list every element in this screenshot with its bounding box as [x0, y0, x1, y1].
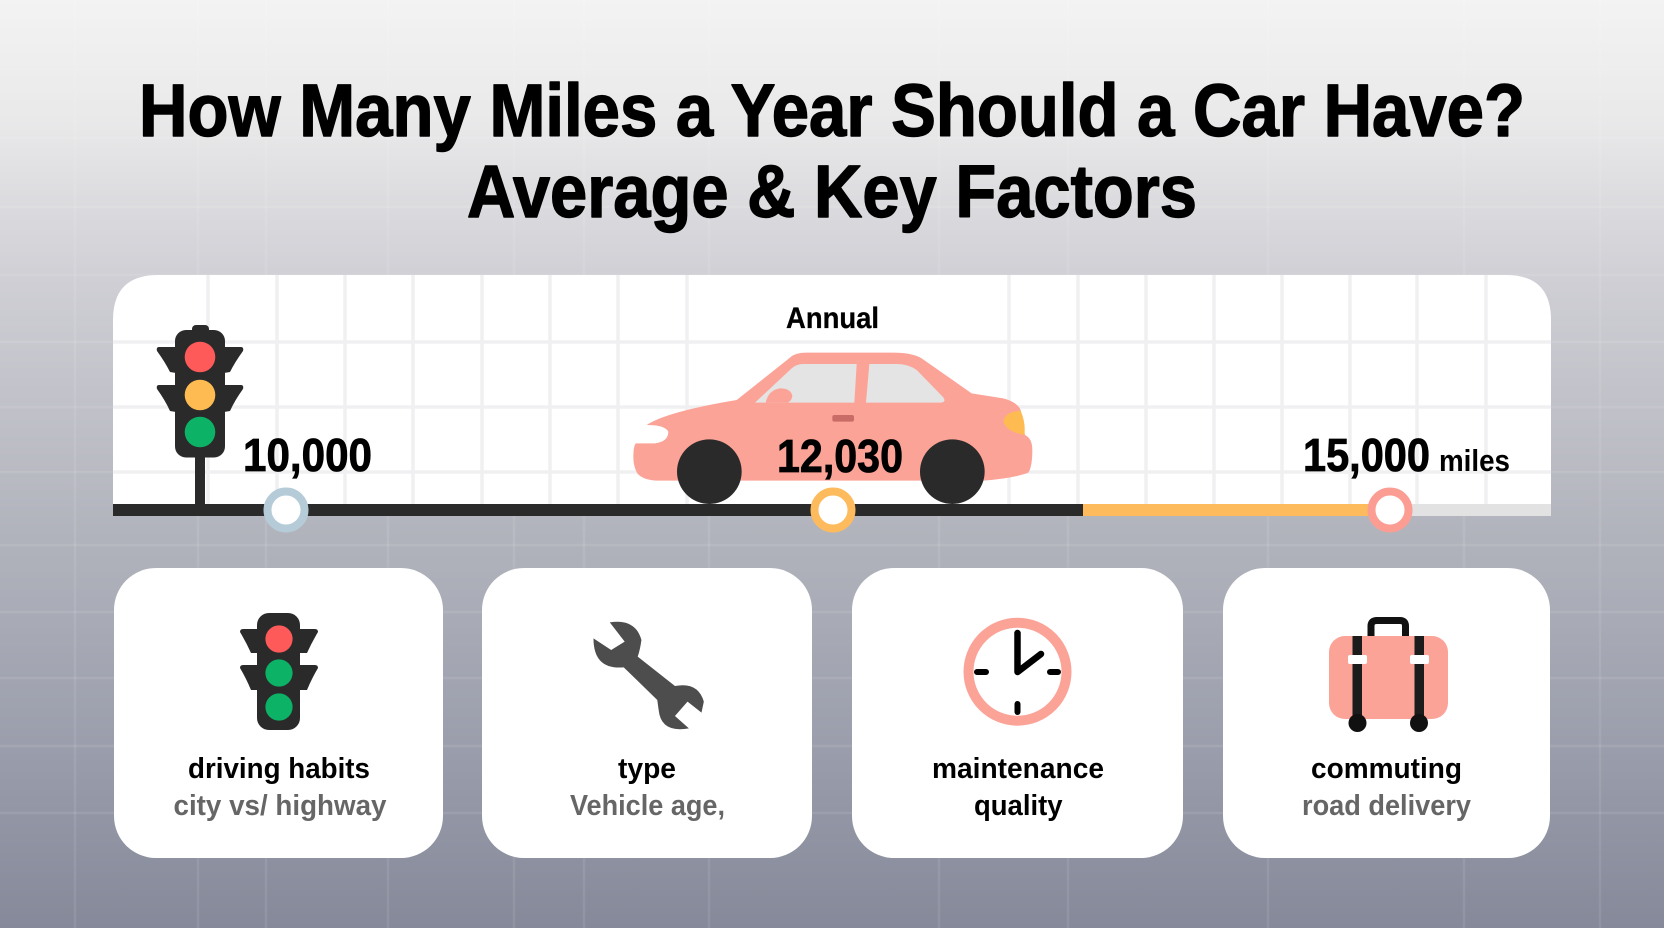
label: 15,000 miles: 15,000	[1303, 429, 1430, 481]
road line	[113, 504, 1551, 516]
heading: maintenance	[932, 753, 1104, 785]
title: How Many Miles a Year Should a Car Have?	[139, 69, 1525, 152]
icon: traffic light	[157, 325, 243, 506]
marker: 10,000	[268, 492, 304, 528]
heading: quality	[974, 790, 1062, 822]
label: 10,000: 10,000	[243, 429, 372, 481]
panel: type	[482, 568, 812, 858]
panel: driving habits	[114, 568, 443, 858]
heading: type	[618, 753, 676, 785]
label: 15,000 miles: miles	[1439, 443, 1510, 478]
title	[139, 69, 1525, 233]
text: city vs/ highway	[174, 790, 386, 822]
label: Annual: Annual	[786, 302, 879, 335]
icon: clock	[968, 623, 1066, 721]
label: 15,000 miles	[1303, 429, 1510, 481]
heading: commuting	[1311, 753, 1462, 785]
heading	[932, 753, 1104, 822]
text: Vehicle age,	[570, 790, 725, 822]
marker: 15,000	[1372, 492, 1408, 528]
panel: maintenance quality	[852, 568, 1183, 858]
label: 12,030: 12,030	[777, 430, 903, 482]
icon: suitcase	[1329, 620, 1448, 732]
panel: annual mileage timeline	[113, 275, 1551, 528]
marker: 12,030	[814, 492, 852, 528]
text: road delivery	[1302, 790, 1471, 822]
icon: traffic light	[240, 613, 318, 730]
title: Average & Key Factors	[467, 150, 1197, 233]
icon: car	[633, 353, 1032, 504]
heading: driving habits	[188, 753, 370, 785]
panel: commuting	[1223, 568, 1550, 858]
icon: wrench	[593, 622, 704, 729]
